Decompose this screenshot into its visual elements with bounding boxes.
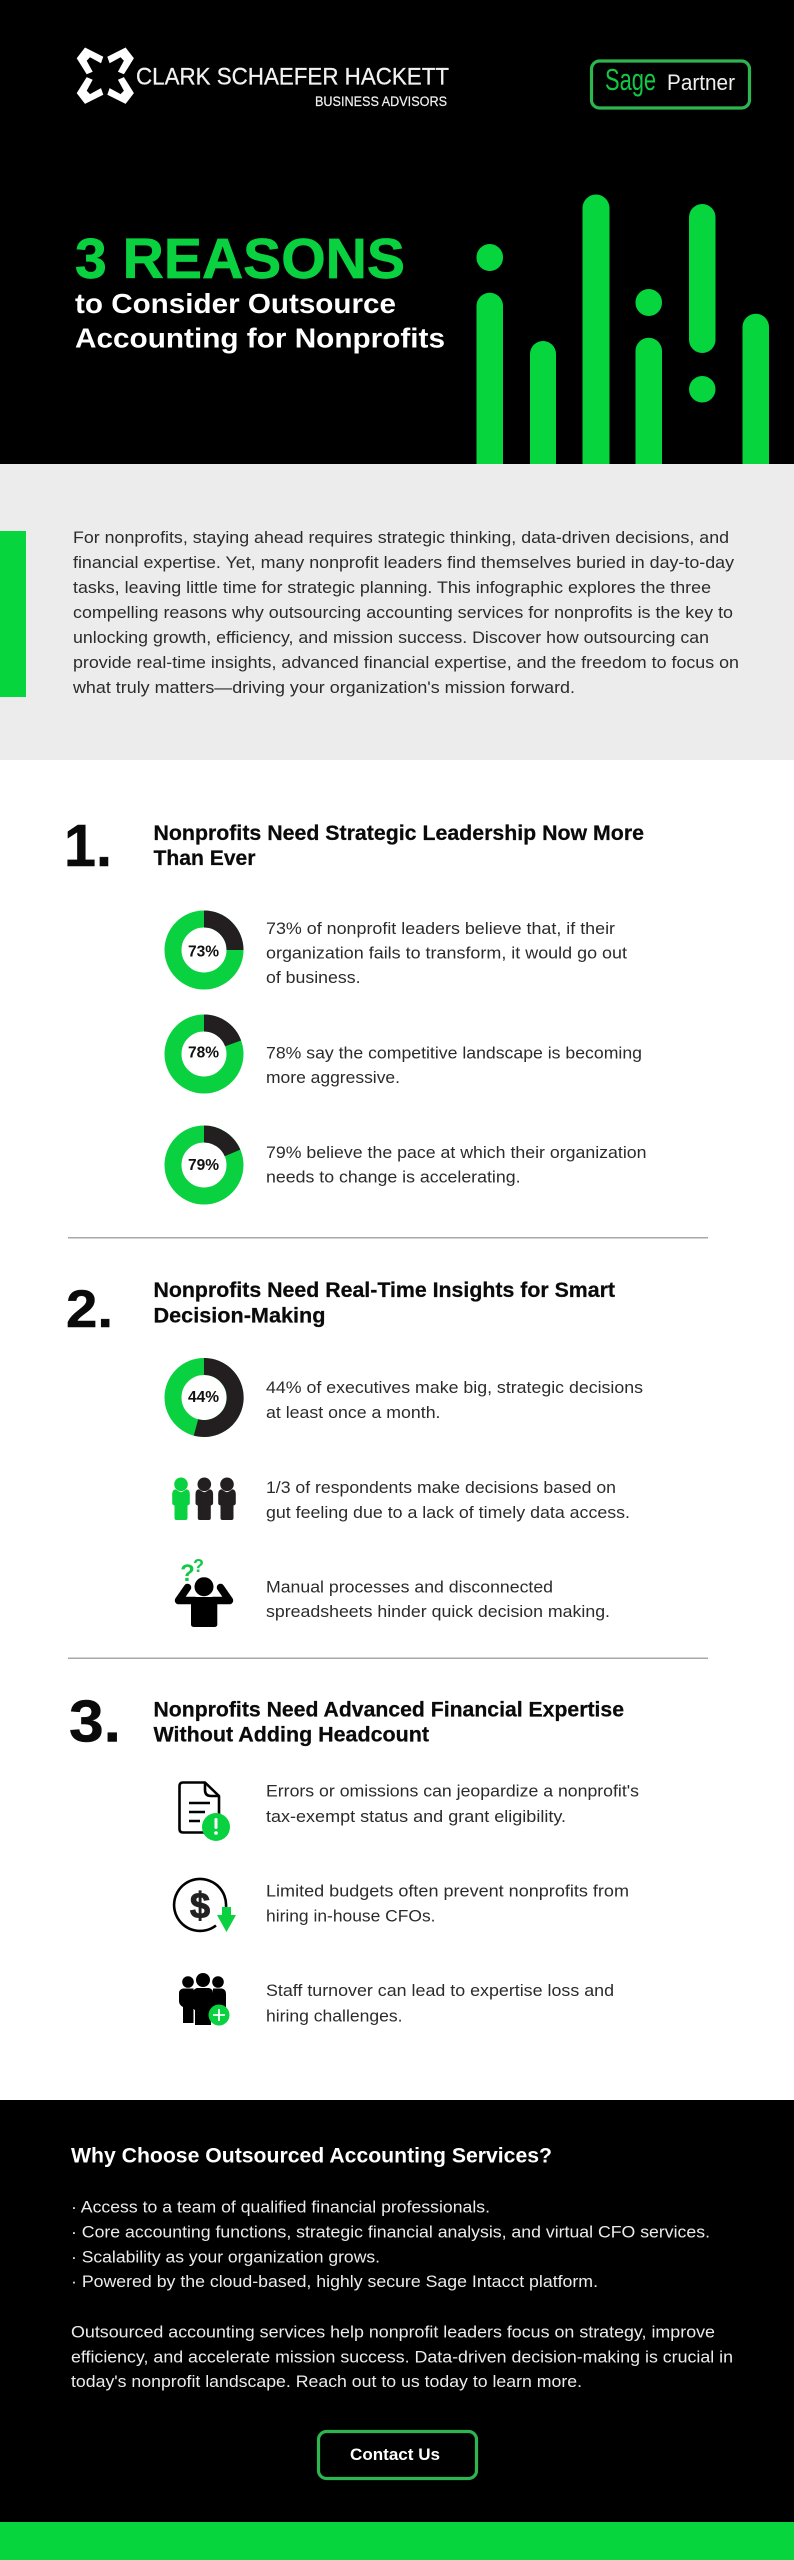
- donut chart: 44%: 44%: [188, 1389, 219, 1406]
- title: [75, 227, 445, 354]
- green person: [172, 1478, 190, 1520]
- stat text: one third: [266, 1478, 630, 1522]
- heading 2: [154, 1279, 615, 1328]
- badge: Sage Partner: Partner: [667, 70, 735, 95]
- stat text: errors: [266, 1782, 639, 1826]
- logo wordmark: CLARK SCHAEFER HACKETT: [136, 64, 449, 90]
- donut chart: 73%: [173, 919, 235, 981]
- stat text: 44%: [266, 1378, 643, 1422]
- intro text: [72, 528, 739, 697]
- intro text: compelling reasons why outsourcing accounting services for nonprofits is the key to: [73, 603, 733, 622]
- intro text: For nonprofits, staying ahead requires strategic thinking, data-driven decisions, and: [73, 528, 729, 547]
- stat text: 78%: more aggressive.: [266, 1068, 400, 1087]
- icon: document with alert: [180, 1782, 230, 1841]
- icon: dollar with down arrow: [174, 1879, 236, 1932]
- number 1: 1.: [64, 813, 112, 879]
- closing paragraph: today's nonprofit landscape. Reach out to us today to learn more.: [71, 2372, 582, 2391]
- stat text: 44%: 44% of executives make big, strategic decisions: [266, 1378, 643, 1397]
- heading 2: Nonprofits Need Real-Time Insights for Smart: [154, 1279, 615, 1302]
- stat text: budgets: hiring in-house CFOs.: [266, 1907, 436, 1926]
- icon: confused person: ?: [180, 1560, 195, 1587]
- title: to Consider Outsource: [75, 288, 396, 319]
- stat text: manual processes: Manual processes and disconnected: [266, 1578, 553, 1597]
- stat text: manual processes: [266, 1578, 610, 1621]
- donut chart: 44%: [173, 1366, 235, 1428]
- stat text: 79%: needs to change is accelerating.: [266, 1168, 520, 1187]
- benefits list: · Scalability as your organization grows.: [71, 2248, 380, 2267]
- donut chart: 79%: 79%: [188, 1157, 219, 1174]
- button: contact us: Contact Us: [350, 2445, 440, 2464]
- stat text: errors: tax-exempt status and grant eligibility.: [266, 1807, 566, 1826]
- panel: introduction: [0, 464, 794, 760]
- footer heading: Why Choose Outsourced Accounting Services?: [71, 2145, 552, 2168]
- stat text: budgets: [266, 1882, 629, 1926]
- icon: team with plus: [179, 1973, 230, 2026]
- icon: logo mark: [77, 48, 134, 104]
- benefits list: · Powered by the cloud-based, highly secure Sage Intacct platform.: [71, 2272, 598, 2291]
- panel: reason 3: [69, 1688, 639, 2026]
- number 3: 3.: [69, 1688, 121, 1754]
- stat text: 78%: 78% say the competitive landscape is becoming: [266, 1044, 642, 1062]
- dark person: [196, 1478, 213, 1520]
- logo: Clark Schaefer Hackett: [77, 48, 449, 109]
- heading 3: Nonprofits Need Advanced Financial Expertise: [154, 1699, 624, 1722]
- badge: Sage Partner: [592, 61, 750, 108]
- logo tagline: BUSINESS ADVISORS: [315, 94, 447, 109]
- benefits list: · Core accounting functions, strategic financial analysis, and virtual CFO services.: [71, 2223, 710, 2242]
- icon: confused person: ?: [193, 1556, 204, 1576]
- heading 3: Without Adding Headcount: [154, 1724, 429, 1747]
- intro text: provide real-time insights, advanced financial expertise, and the freedom to focus on: [73, 653, 739, 672]
- icon: confused person: [178, 1556, 230, 1627]
- title: Accounting for Nonprofits: [75, 322, 445, 354]
- heading 3: [154, 1699, 624, 1747]
- closing paragraph: Outsourced accounting services help nonprofit leaders focus on strategy, improve: [71, 2323, 715, 2342]
- benefits list: · Access to a team of qualified financial professionals.: [71, 2198, 490, 2217]
- dark person: [218, 1478, 236, 1520]
- badge: Sage Partner: Sage: [605, 62, 656, 97]
- panel: reason 1: [64, 813, 646, 1196]
- donut chart: 78%: [173, 1023, 235, 1085]
- stat text: 78%: [266, 1044, 642, 1087]
- benefits list: [71, 2198, 710, 2291]
- stat text: 73%: of business.: [266, 968, 360, 987]
- accent bar: [0, 531, 26, 697]
- panel: header: [0, 0, 794, 464]
- heading 1: [154, 822, 644, 870]
- heading 2: Decision-Making: [154, 1305, 326, 1328]
- stat text: 73%: organization fails to transform, it would go out: [266, 944, 627, 962]
- stat text: 79%: [266, 1143, 646, 1187]
- decorative graphic: green bars and dots: [476, 194, 769, 464]
- donut chart: 79%: [173, 1134, 235, 1196]
- heading 1: Nonprofits Need Strategic Leadership Now More: [154, 822, 644, 845]
- stat text: 44%: at least once a month.: [266, 1403, 440, 1422]
- intro text: unlocking growth, efficiency, and mission success. Discover how outsourcing can: [73, 628, 709, 647]
- title: 3 REASONS: [75, 227, 405, 291]
- stat text: staff turnover: Staff turnover can lead to expertise loss and: [266, 1981, 614, 2000]
- closing paragraph: [71, 2323, 733, 2391]
- stat text: staff turnover: [266, 1981, 614, 2026]
- icon: dollar with down arrow: $: [190, 1885, 210, 1926]
- intro text: what truly matters—driving your organization's mission forward.: [72, 678, 575, 697]
- icon: one in three people: [172, 1478, 236, 1520]
- stat text: staff turnover: hiring challenges.: [266, 2007, 402, 2026]
- panel: reason 2: [66, 1279, 643, 1627]
- stat text: errors: Errors or omissions can jeopardize a nonprofit's: [266, 1782, 639, 1801]
- donut chart: 78%: 78%: [188, 1044, 219, 1062]
- closing paragraph: efficiency, and accelerate mission success. Data-driven decision-making is crucial in: [71, 2348, 733, 2367]
- intro text: tasks, leaving little time for strategic planning. This infographic explores the three: [73, 578, 711, 597]
- heading 1: Than Ever: [154, 847, 256, 870]
- donut chart: 73%: 73%: [188, 944, 219, 960]
- stat text: 73%: 73% of nonprofit leaders believe that, if their: [266, 919, 615, 938]
- stat text: one third: 1/3 of respondents make decisions based on: [266, 1478, 616, 1497]
- stat text: 79%: 79% believe the pace at which their organization: [266, 1143, 646, 1162]
- stat text: one third: gut feeling due to a lack of timely data access.: [266, 1503, 630, 1522]
- number 2: 2.: [66, 1280, 113, 1339]
- footer green band: [0, 2522, 794, 2560]
- button: contact us: [318, 2432, 476, 2478]
- stat text: budgets: Limited budgets often prevent nonprofits from: [266, 1882, 629, 1901]
- intro text: financial expertise. Yet, many nonprofit leaders find themselves buried in day-to-day: [73, 553, 735, 572]
- stat text: 73%: [266, 919, 627, 987]
- panel: footer: [0, 2100, 794, 2522]
- stat text: manual processes: spreadsheets hinder quick decision making.: [266, 1602, 610, 1621]
